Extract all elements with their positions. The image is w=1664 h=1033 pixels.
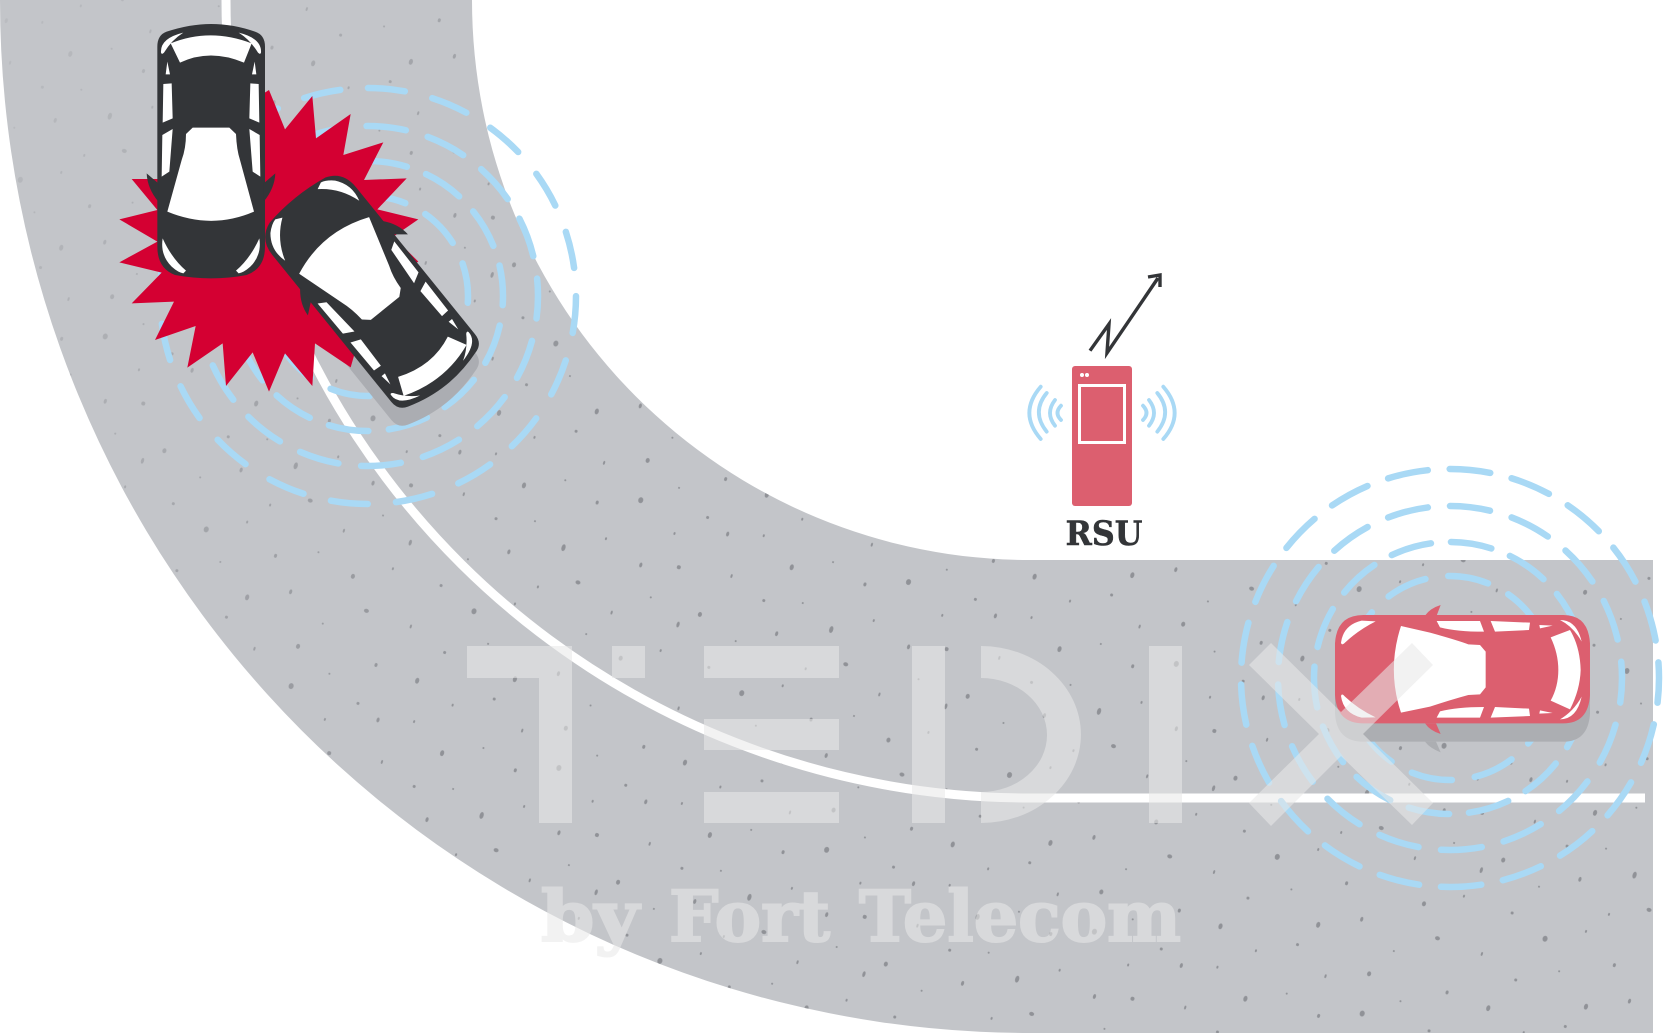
lightning arrow — [1090, 275, 1160, 353]
logo byline: Telecom — [859, 875, 1181, 958]
signal rings: crash site — [160, 88, 576, 504]
signal rings: red car — [1241, 469, 1659, 887]
logo byline: Fort — [669, 875, 830, 958]
black car: diagonal — [245, 157, 497, 425]
logo letters TEDIX — [467, 643, 1433, 826]
RSU signal waves — [1029, 387, 1175, 439]
RSU label: RSU — [1066, 514, 1142, 554]
RSU cabinet — [1072, 366, 1132, 506]
logo byline: by — [541, 875, 642, 958]
crash starburst — [119, 90, 418, 392]
diagonal car shadow — [254, 182, 488, 436]
road centre line — [226, 0, 1645, 798]
RSU screen — [1080, 386, 1124, 442]
RSU roadside unit — [1029, 275, 1175, 554]
watermark logo — [467, 643, 1433, 958]
RSU status dots — [1080, 373, 1089, 377]
red car with shadow — [1335, 605, 1590, 752]
black car: vertical — [147, 24, 275, 278]
